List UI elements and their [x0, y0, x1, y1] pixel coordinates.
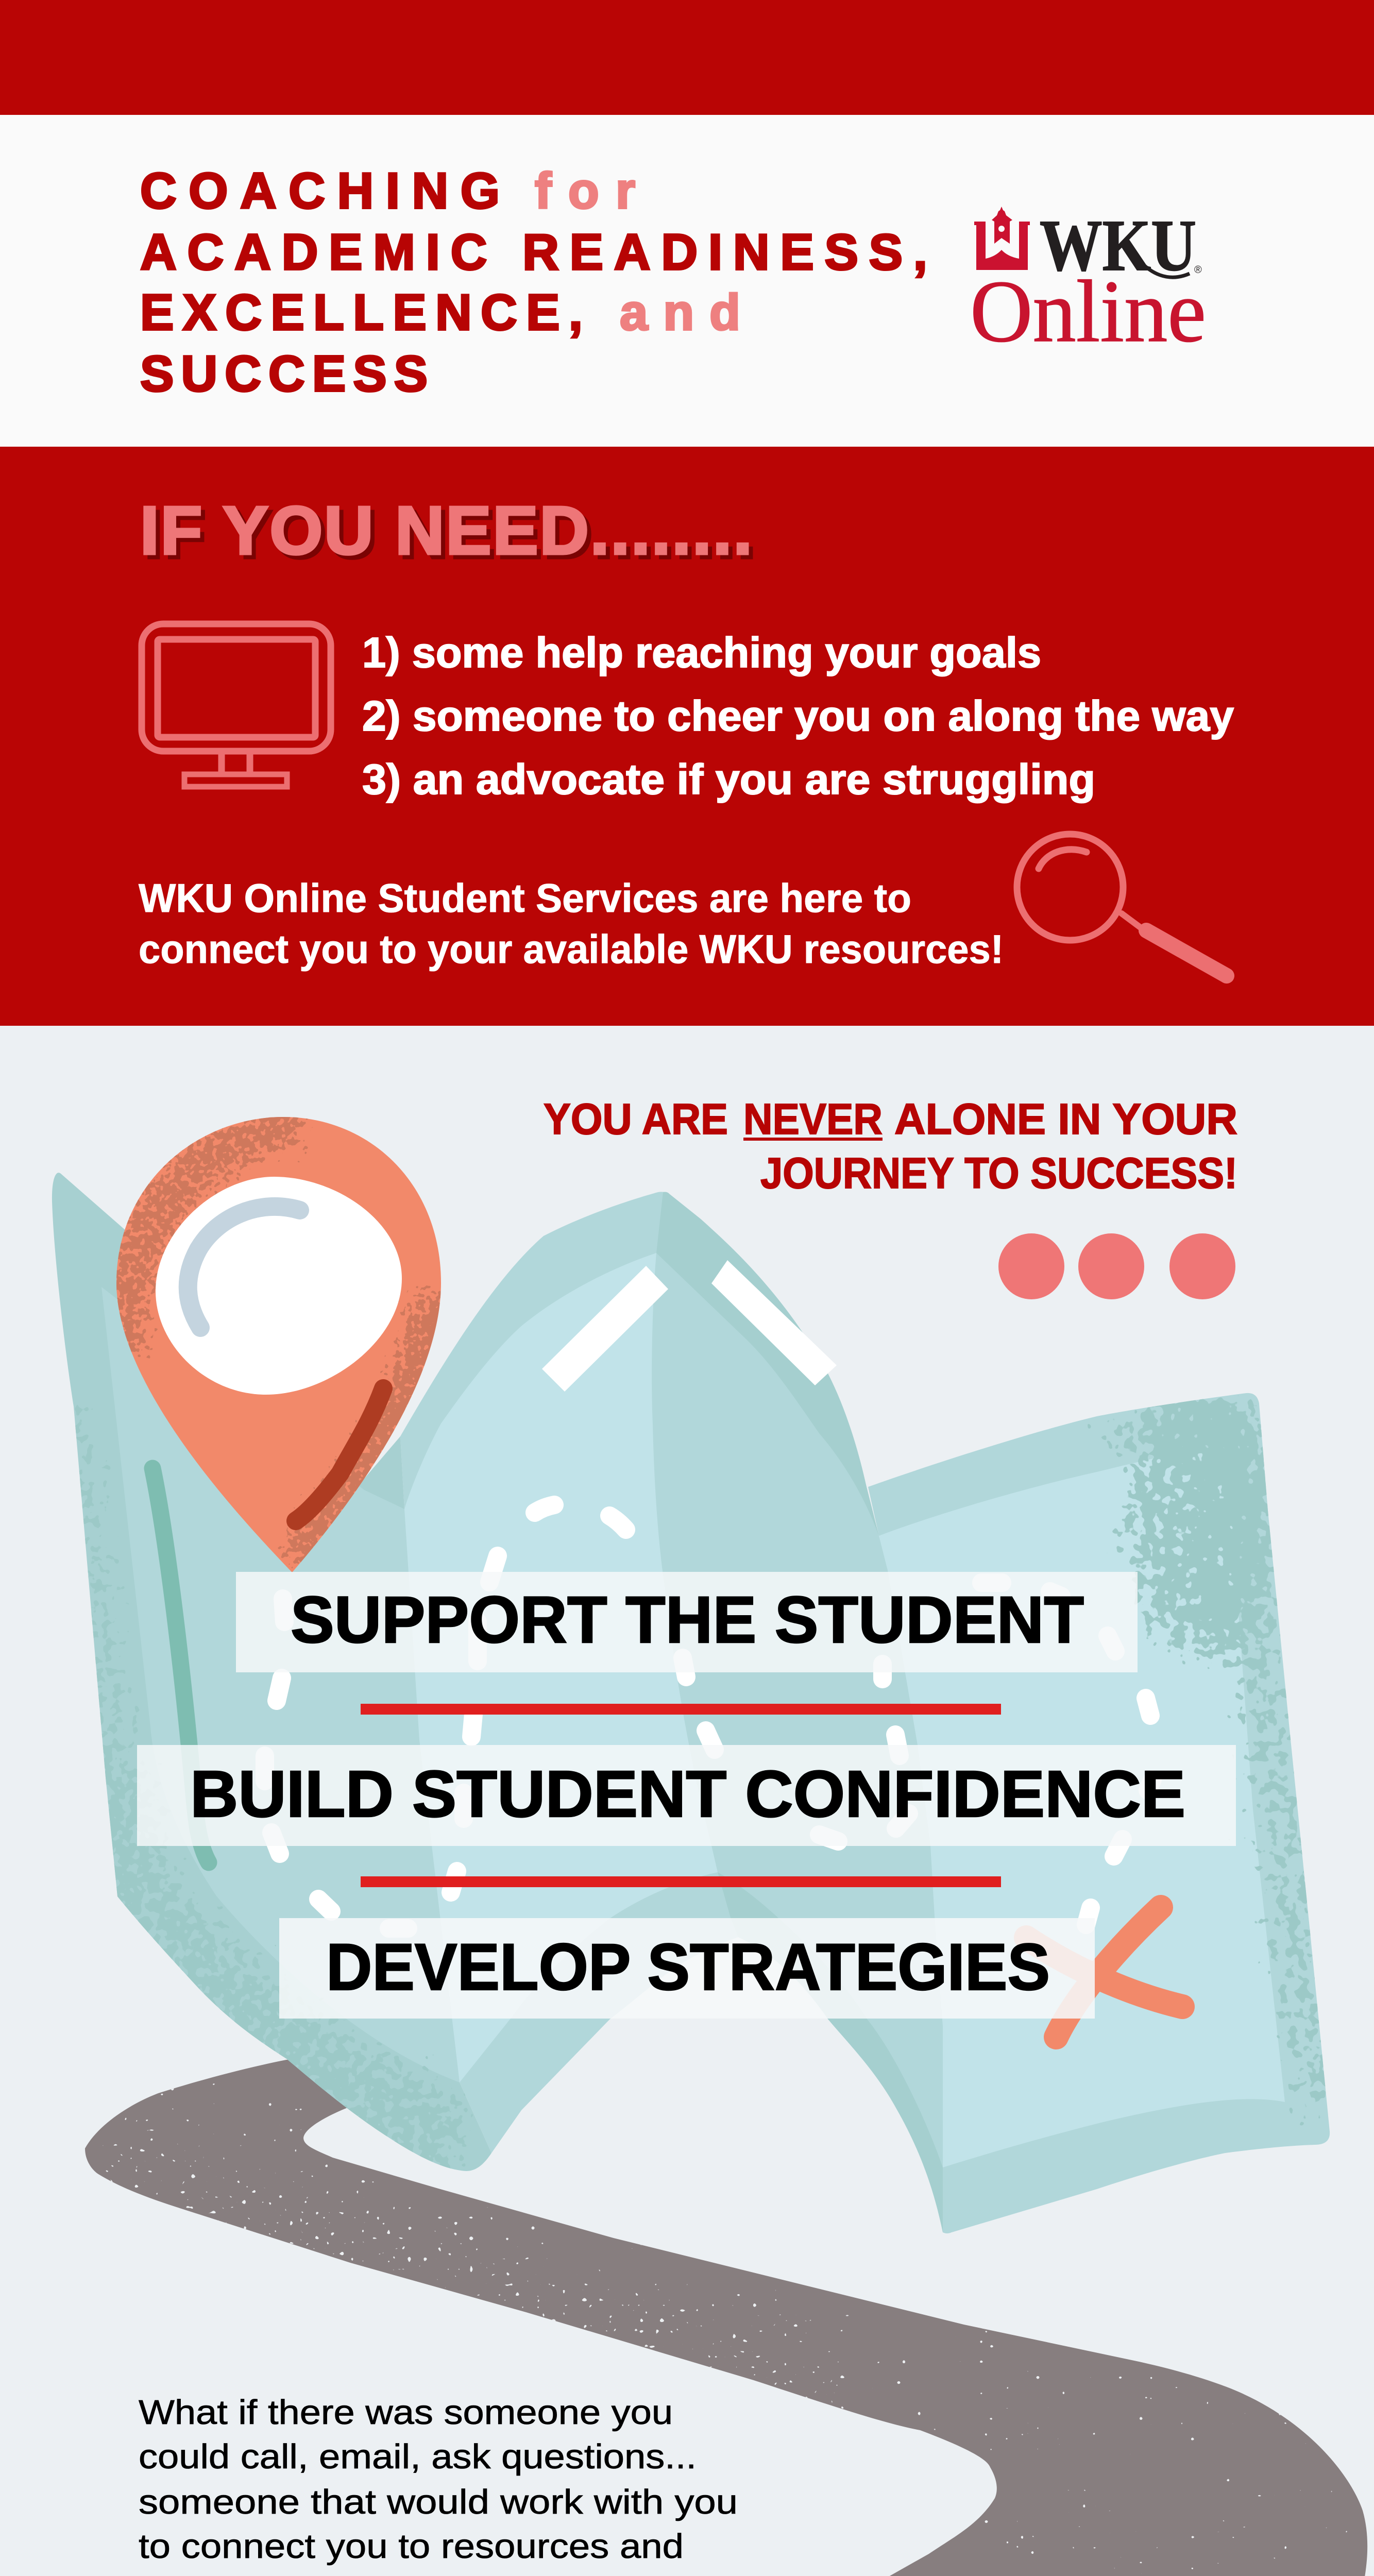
panel: title band — [0, 115, 1374, 447]
question paragraph: What if there was someone you — [139, 2393, 673, 2432]
question paragraph: could call, email, ask questions... — [139, 2437, 697, 2476]
heading: if you need: IF YOU NEED........ — [144, 497, 756, 572]
map: right page — [868, 1386, 1330, 2233]
map: centre fold shade bottom — [718, 1872, 943, 2232]
map: centre light face — [404, 1253, 718, 2082]
title: EXCELLENCE, — [140, 284, 583, 341]
needs list — [362, 629, 1234, 803]
logo: WKU Online: ® — [1194, 264, 1202, 276]
student services text — [139, 875, 1004, 972]
icon: magnifying glass — [1017, 834, 1227, 976]
needs list: 3) an advocate if you are struggling — [362, 755, 1095, 803]
question paragraph: to connect you to resources and — [139, 2527, 684, 2566]
banner: develop strategies — [279, 1918, 1095, 2019]
question paragraph: someone that would work with you — [139, 2483, 738, 2521]
map: folded paper tabs — [542, 1260, 837, 1392]
map: centre fold shade top — [656, 1192, 879, 1536]
logo: WKU Online: WKU — [1040, 205, 1196, 286]
banner: support the student: SUPPORT THE STUDENT — [291, 1583, 1084, 1657]
banner: build student confidence — [137, 1745, 1236, 1846]
road — [31, 2035, 1374, 2576]
banner: support the student — [236, 1572, 1138, 1672]
needs list: 2) someone to cheer you on along the way — [362, 692, 1234, 740]
never alone message: YOU ARE — [544, 1095, 728, 1143]
panel: if you need — [0, 447, 1374, 1026]
banner: develop strategies: DEVELOP STRATEGIES — [326, 1930, 1050, 2004]
title: ACADEMIC READINESS, — [140, 224, 927, 280]
heading: if you need: IF YOU NEED........ — [140, 493, 752, 568]
title: COACHING — [140, 162, 500, 219]
needs list: 1) some help reaching your goals — [362, 629, 1041, 676]
map: centre panel — [400, 1192, 943, 2232]
map: orange X destination — [1026, 1907, 1182, 2037]
red divider one — [361, 1704, 1001, 1715]
title: and — [620, 284, 740, 341]
never alone message: JOURNEY TO SUCCESS! — [760, 1149, 1237, 1197]
question paragraph — [139, 2393, 738, 2576]
title — [140, 162, 927, 402]
map illustration — [52, 1173, 1330, 2233]
map: dashed route — [265, 1505, 1152, 1928]
student services text: WKU Online Student Services are here to — [139, 875, 911, 921]
title: SUCCESS — [140, 345, 428, 402]
student services text: connect you to your available WKU resources! — [139, 926, 1004, 972]
never alone message: NEVER — [743, 1095, 883, 1143]
never alone message — [544, 1095, 1237, 1197]
icon: location pin — [116, 1117, 441, 1572]
red divider two — [361, 1876, 1001, 1887]
banner: build student confidence: BUILD STUDENT CONFIDENCE — [190, 1757, 1185, 1831]
top red bar — [0, 0, 1374, 115]
icon: monitor — [142, 624, 331, 787]
three dots — [998, 1233, 1235, 1299]
map: left page — [52, 1173, 491, 2171]
map: green stripe — [152, 1468, 209, 1862]
logo: WKU Online: Online — [970, 263, 1206, 361]
logo: WKU Online — [970, 205, 1206, 361]
title: for — [535, 162, 635, 219]
never alone message: ALONE IN YOUR — [894, 1095, 1237, 1143]
